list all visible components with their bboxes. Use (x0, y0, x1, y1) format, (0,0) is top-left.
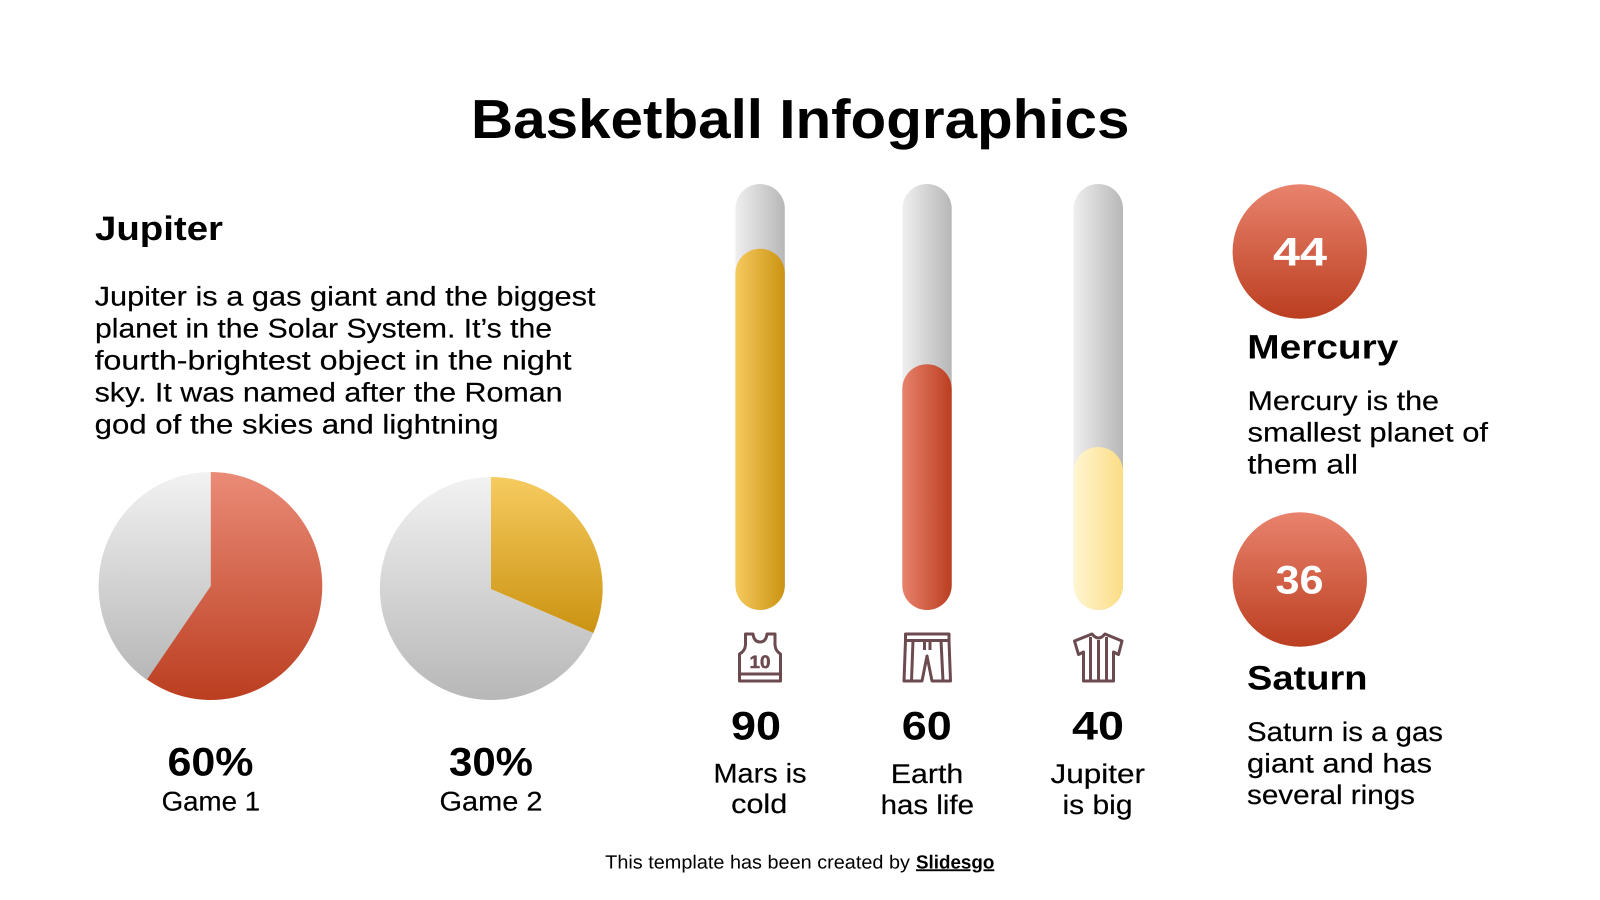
badge: 36: 36 (1276, 558, 1324, 602)
text block: Saturn body: Saturn is a gas (1247, 717, 1443, 747)
icon: referee shirt (1074, 634, 1122, 681)
text block: Jupiter body: planet in the Solar System. It’s the (95, 314, 552, 344)
footer credit: This template has been created by (605, 852, 911, 873)
icon: basketball jersey (740, 634, 780, 681)
panel: column Jupiter (1050, 184, 1145, 820)
text block: Jupiter body (95, 282, 596, 440)
text block: Jupiter body: god of the skies and lightning (95, 410, 499, 440)
label: Earth has life: has life (881, 790, 974, 820)
label: Earth has life: Earth (891, 759, 963, 789)
label: Jupiter is big: is big (1062, 790, 1132, 820)
progress bar: 90 (735, 184, 785, 610)
label: Jupiter is big: Jupiter (1050, 759, 1145, 789)
label: Mars is cold (714, 758, 806, 819)
text block: Saturn body (1247, 717, 1443, 810)
text block: Mercury body: them all (1248, 449, 1358, 479)
panel: pie chart game 1 (99, 472, 322, 817)
heading: Saturn: Saturn (1247, 659, 1368, 697)
heading: Jupiter: Jupiter (95, 210, 223, 248)
pie chart: 60 percent (99, 472, 322, 700)
panel: column Earth (881, 184, 974, 820)
text block: Mercury body (1248, 386, 1489, 479)
badge: 44 (1233, 184, 1367, 319)
value: 60%: 60% (168, 740, 254, 784)
footer credit: Slidesgo (916, 852, 994, 873)
panel: Mercury (1233, 184, 1489, 479)
progress bar: 40 (1074, 184, 1123, 610)
badge: 44: 44 (1273, 230, 1328, 274)
text block: Jupiter body: Jupiter is a gas giant and the biggest (95, 282, 596, 312)
pie chart: 30 percent (380, 477, 603, 700)
text block: Mercury body: Mercury is the (1248, 386, 1439, 416)
label: Mars is cold: cold (731, 789, 787, 819)
title: Basketball Infographics (471, 88, 1130, 150)
label: Game 1: Game 1 (162, 787, 260, 817)
text block: Jupiter body: sky. It was named after the Roman (95, 378, 563, 408)
label: Game 2: Game 2 (440, 787, 542, 817)
text block: Saturn body: several rings (1247, 780, 1415, 810)
label: Jupiter is big (1050, 759, 1145, 820)
text block: Mercury body: smallest planet of (1248, 418, 1489, 448)
value: 40: 40 (1072, 704, 1124, 748)
label: Earth has life (881, 759, 974, 820)
label: Mars is cold: Mars is (714, 758, 806, 788)
value: 30%: 30% (449, 740, 533, 784)
badge: 36 (1233, 512, 1367, 647)
panel: Jupiter description (95, 210, 596, 440)
heading: Mercury: Mercury (1247, 328, 1398, 366)
icon: basketball shorts (904, 634, 950, 681)
text block: Jupiter body: fourth-brightest object in the night (95, 346, 572, 376)
value: 60: 60 (902, 704, 952, 748)
panel: column Mars (714, 184, 806, 819)
text block: Saturn body: giant and has (1247, 748, 1432, 778)
panel: Saturn (1233, 512, 1443, 810)
progress bar: 60 (902, 184, 952, 610)
value: 90: 90 (731, 704, 781, 748)
panel: pie chart game 2 (380, 477, 603, 817)
icon: basketball jersey: 10 (750, 652, 770, 672)
